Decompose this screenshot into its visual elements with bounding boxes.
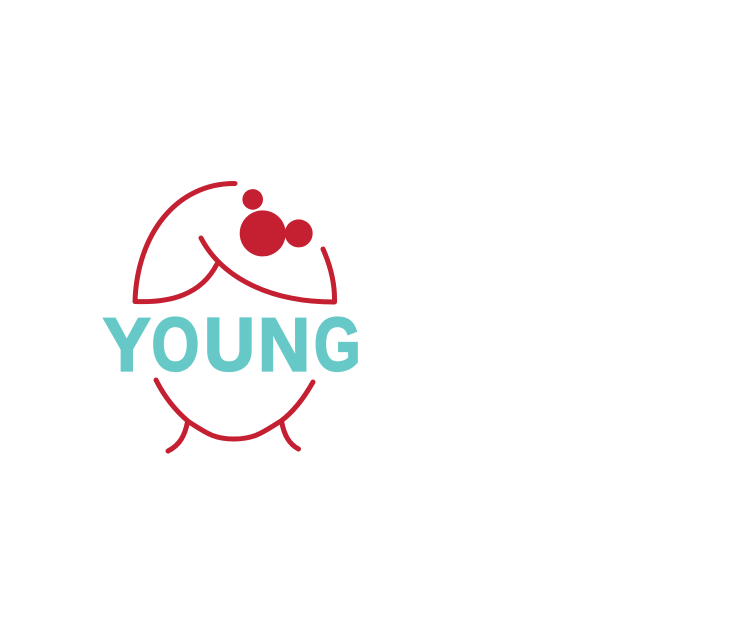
- wordmark: YOUNG: U: [204, 304, 255, 387]
- wordmark: YOUNG: O: [152, 303, 199, 387]
- wordmark: YOUNG: G: [314, 304, 361, 387]
- wordmark: YOUNG: [103, 303, 361, 387]
- icon: chin and neck outline: [156, 380, 313, 451]
- wordmark: YOUNG: Y: [103, 304, 151, 387]
- wordmark: YOUNG: N: [258, 303, 310, 387]
- icon: hair bun circles: [240, 189, 313, 256]
- icon: hair outline: [135, 183, 335, 302]
